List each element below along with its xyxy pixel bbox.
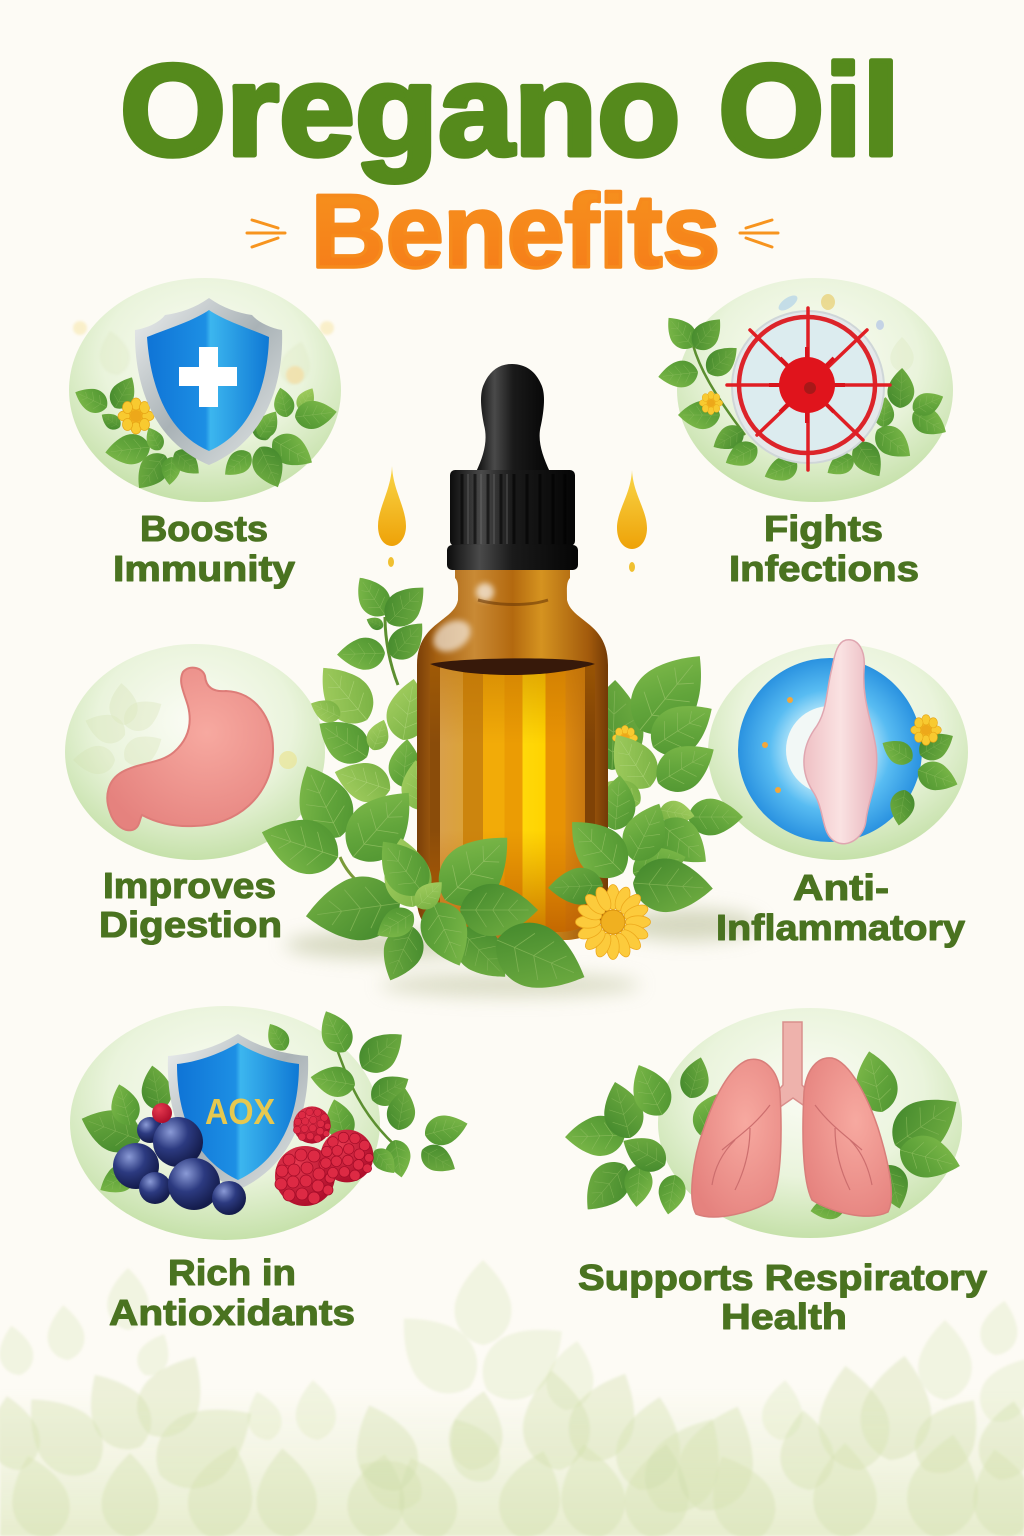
icon: faint leaves behind shield [73, 321, 334, 389]
title: Oregano Oil [120, 37, 900, 183]
panel: anti-inflammatory [708, 640, 968, 860]
panel: boosts immunity [69, 278, 341, 502]
icon: lungs [692, 1022, 891, 1217]
icon: inflamed tissue [804, 640, 877, 844]
bottle [417, 364, 608, 940]
icon: oil drop left [378, 466, 406, 567]
label: rich in antioxidants: Antioxidants [109, 1292, 355, 1333]
label: improves digestion [99, 865, 282, 945]
label: anti-inflammatory: Inflammatory [716, 907, 965, 948]
icon: faint decorations [776, 293, 914, 372]
sparkle right [740, 220, 778, 247]
icon: ground shadow [285, 909, 760, 997]
icon: AOX shield [168, 1034, 308, 1190]
icon: yellow flower [576, 884, 650, 960]
label: rich in antioxidants [109, 1252, 355, 1333]
icon: stomach [107, 668, 273, 830]
label: fights infections [729, 508, 919, 589]
icon: oil drop right [617, 470, 647, 572]
label: boosts immunity: Immunity [113, 548, 295, 589]
icon: raspberries [275, 1106, 373, 1206]
label: boosts immunity [113, 508, 295, 589]
icon: leaves around target [657, 310, 952, 487]
sparkle left [247, 220, 285, 247]
foliage behind bottle [306, 569, 743, 835]
label: fights infections: Infections [729, 548, 919, 589]
icon: leaves and flower [877, 715, 962, 828]
panel: improves digestion [65, 644, 325, 860]
icon: faint leaves [73, 682, 297, 774]
icon: leaves around shield [70, 372, 338, 497]
subtitle: Benefits [311, 174, 720, 290]
label: rich in antioxidants: Rich in [168, 1252, 296, 1293]
icon: AOX shield: AOX [205, 1091, 275, 1132]
label: fights infections: Fights [764, 508, 883, 549]
label: improves digestion: Digestion [99, 904, 282, 945]
glass highlight [428, 583, 548, 658]
glass body [417, 568, 608, 940]
bottle cap [447, 470, 578, 570]
icon: blueberries [113, 1103, 246, 1215]
foliage in front of bottle [254, 755, 719, 1006]
icon: leaves [75, 1005, 471, 1202]
panel: respiratory health [564, 1008, 971, 1238]
icon: shield with cross [135, 298, 282, 465]
label: supports respiratory health [578, 1257, 987, 1337]
label: anti-inflammatory: Anti- [793, 867, 889, 908]
label: supports respiratory health: Supports Respiratory [578, 1257, 987, 1298]
icon: leaves [564, 1047, 971, 1223]
oil [430, 658, 595, 932]
panel: rich in antioxidants [70, 1005, 471, 1240]
icon: virus target [727, 308, 890, 470]
background foliage [0, 1260, 1024, 1536]
label: boosts immunity: Boosts [140, 508, 268, 549]
label: supports respiratory health: Health [721, 1296, 847, 1337]
panel: fights infections [657, 278, 953, 502]
label: improves digestion: Improves [103, 865, 276, 906]
label: anti-inflammatory [716, 867, 965, 948]
icon: blue ring [738, 658, 922, 842]
dropper bulb [476, 364, 550, 472]
